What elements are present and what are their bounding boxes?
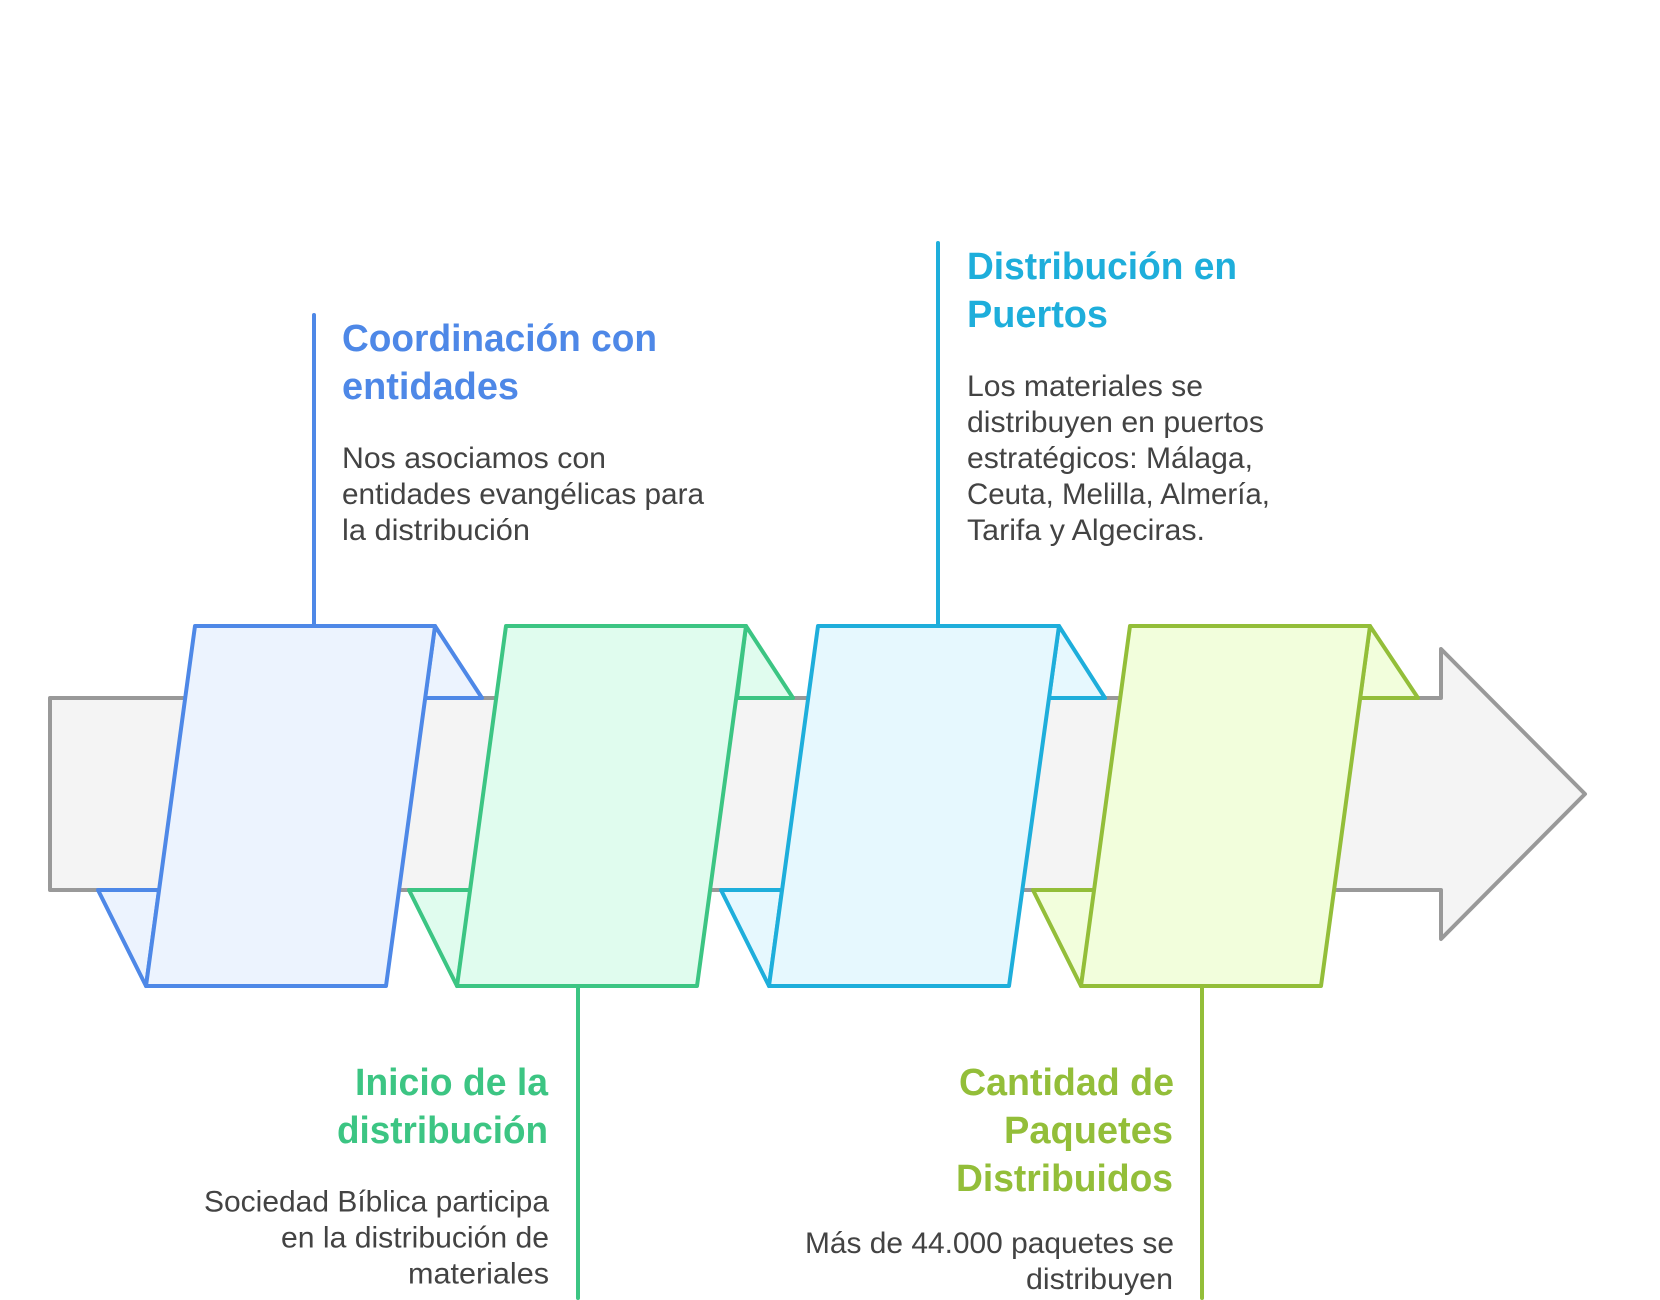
body text: Ceuta, Melilla, Almería, xyxy=(967,478,1270,511)
body text: entidades evangélicas para xyxy=(342,478,705,511)
body text: distribuyen xyxy=(1026,1263,1173,1296)
heading: Cantidad de xyxy=(959,1062,1174,1104)
heading: Distribución en xyxy=(967,246,1237,288)
text block: Distribución en Puertos xyxy=(967,246,1270,547)
heading: Distribuidos xyxy=(956,1158,1173,1200)
heading xyxy=(967,246,1237,336)
text block: Coordinación con entidades xyxy=(342,318,705,547)
body text xyxy=(342,442,705,547)
text block: Cantidad de Paquetes Distribuidos xyxy=(805,1062,1174,1296)
body text: materiales xyxy=(408,1258,549,1290)
body text: Los materiales se xyxy=(967,370,1203,403)
body text: estratégicos: Málaga, xyxy=(967,442,1253,475)
body text: Sociedad Bíblica participa xyxy=(204,1186,550,1218)
panel: step 2 shape xyxy=(409,626,793,1298)
body text: Más de 44.000 paquetes se xyxy=(805,1227,1174,1260)
body text xyxy=(204,1186,550,1290)
panel: step 1 shape xyxy=(98,315,482,986)
text block: Inicio de la distribución xyxy=(204,1062,550,1290)
heading: Coordinación con xyxy=(342,318,657,360)
body text xyxy=(805,1227,1174,1296)
panel: step 4 shape xyxy=(1033,626,1418,1298)
body text: Tarifa y Algeciras. xyxy=(967,514,1205,547)
background arrow xyxy=(50,649,1585,939)
heading: Paquetes xyxy=(1004,1110,1173,1152)
heading: Puertos xyxy=(967,294,1108,336)
heading xyxy=(342,318,657,408)
body text: en la distribución de xyxy=(281,1222,549,1254)
heading: distribución xyxy=(337,1110,548,1152)
body text: distribuyen en puertos xyxy=(967,406,1264,439)
body text: la distribución xyxy=(342,514,530,547)
heading xyxy=(337,1062,549,1152)
panel: step 3 shape xyxy=(721,243,1105,986)
heading: Inicio de la xyxy=(355,1062,549,1104)
body text xyxy=(967,370,1270,547)
heading: entidades xyxy=(342,366,519,408)
body text: Nos asociamos con xyxy=(342,442,606,475)
heading xyxy=(956,1062,1174,1200)
